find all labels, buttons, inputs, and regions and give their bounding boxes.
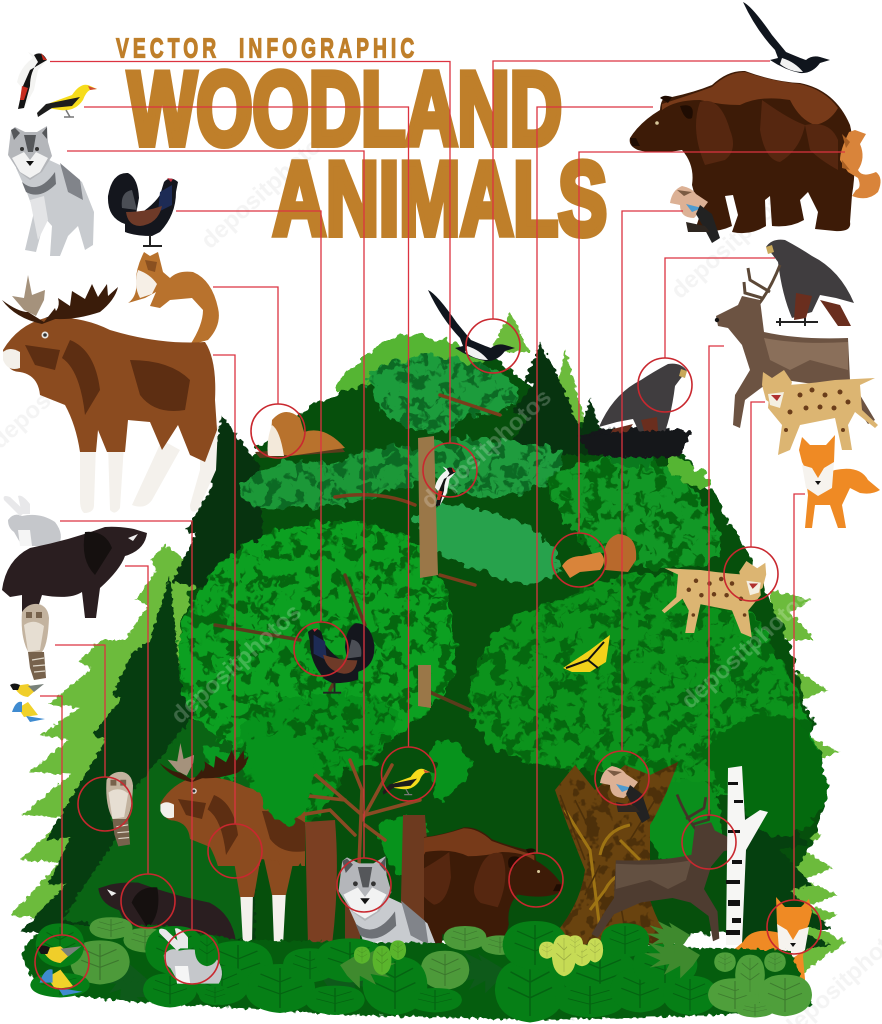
owl in forest [106, 772, 133, 846]
leaves over hare [195, 934, 231, 1005]
icon: ural owl [22, 604, 49, 680]
line: lynx [751, 402, 765, 547]
line: oriole [84, 107, 408, 747]
pine branches [300, 760, 420, 890]
icon: wild boar [2, 527, 147, 620]
jay in forest [600, 766, 650, 823]
line: owl [55, 645, 105, 777]
icon: golden eagle [766, 240, 854, 326]
forest watermarks: depositphotos [676, 584, 817, 714]
forest watermarks: depositphotos [416, 384, 557, 514]
fern fronds [89, 952, 568, 1010]
line: boar [125, 566, 148, 874]
icon: hare [4, 496, 61, 546]
pale leaves right [708, 952, 812, 1018]
oak trunk [545, 762, 678, 945]
moose upper legs [232, 850, 296, 897]
line: marten [213, 287, 278, 404]
circle: fox [767, 900, 821, 954]
light crown highlights [335, 336, 712, 490]
dark firs [172, 343, 604, 600]
tits in forest [37, 946, 82, 996]
oriole in forest [383, 769, 431, 795]
forest animals [98, 290, 812, 1012]
line: magpie [493, 61, 770, 319]
left oak crown [178, 521, 457, 760]
circle: hare [165, 930, 219, 984]
icon: tits [10, 684, 45, 722]
branches [215, 395, 500, 710]
marten on branch [255, 412, 345, 458]
moose body and head [160, 743, 305, 866]
circle: deer [682, 815, 736, 869]
yellow leaves [539, 935, 603, 976]
lower canopy bushes [205, 694, 470, 878]
wolf in forest [339, 856, 442, 1012]
nest [578, 427, 692, 458]
moose legs [240, 890, 286, 945]
callout circles [35, 319, 821, 989]
lynx in forest [662, 561, 766, 638]
callout lines [40, 61, 845, 935]
scalloped base [22, 925, 812, 1020]
icon: moose [2, 275, 218, 513]
circle: tits [35, 935, 89, 989]
circle: squirrel [552, 533, 606, 587]
canopy base silhouette [160, 345, 826, 950]
line: jay [622, 211, 683, 751]
forest watermarks: depositphotos [166, 599, 307, 729]
foreground leaves [22, 917, 812, 1022]
animals list: right column [630, 2, 881, 528]
upper crown [238, 355, 722, 585]
dark fir left [20, 575, 255, 945]
watermarks on paper: depositphotos [666, 174, 807, 304]
light green firs [10, 312, 846, 975]
central fern and pale fronds [340, 921, 700, 988]
icon: woodpecker [17, 52, 47, 109]
woodpecker in forest [435, 466, 456, 506]
circle: jay [595, 751, 649, 805]
line: fox [794, 494, 805, 900]
icon: pine marten [128, 252, 219, 345]
circle: magpie [466, 319, 520, 373]
understory tree trunks [300, 760, 435, 945]
line: eagle [665, 258, 775, 358]
dark fir right [735, 800, 832, 960]
magpie in forest [428, 290, 515, 361]
nest front [580, 431, 692, 458]
line: tits [40, 696, 62, 935]
bear in forest [424, 827, 562, 944]
icon: capercaillie [108, 173, 178, 246]
circle: moose [208, 824, 262, 878]
watermarks on paper: depositphotos [196, 124, 337, 254]
line: hare [60, 521, 192, 930]
circle: boar [121, 874, 175, 928]
birch trunk [726, 766, 768, 945]
icon: lynx [762, 370, 878, 455]
title block [116, 34, 607, 258]
icon: grey wolf [8, 126, 94, 256]
deer in forest [591, 794, 736, 941]
hare among leaves [159, 928, 222, 984]
circle: woodpecker [423, 443, 477, 497]
line: wolf [67, 151, 364, 858]
line: woodpecker [50, 62, 450, 443]
squirrel in forest [562, 534, 636, 578]
boar in forest [98, 882, 236, 971]
circle: owl [78, 777, 132, 831]
fox in forest [731, 897, 812, 990]
icon: red fox [799, 435, 880, 528]
moose in forest [160, 743, 332, 945]
icon: red squirrel on bear [840, 130, 881, 198]
bush over moose [245, 734, 316, 825]
mid green leaves [30, 921, 717, 1022]
subtitle: VECTOR INFOGRAPHIC [116, 34, 418, 64]
line: squirrel [579, 152, 845, 533]
line: deer [709, 346, 724, 815]
capercaillie in forest [308, 623, 374, 693]
circle: bear [509, 853, 563, 907]
bright green tall leaves [354, 940, 406, 975]
right oak crown [469, 574, 827, 865]
line: bear [537, 107, 653, 853]
circle: marten [251, 404, 305, 458]
heading: woodland: WOODLAND [128, 52, 562, 168]
circle: lynx [724, 547, 778, 601]
circle: capercaillie [294, 622, 348, 676]
animals list: left column [2, 52, 219, 722]
brown trunk left [305, 820, 337, 945]
heading: animals: ANIMALS [273, 142, 607, 258]
brown trunk mid [345, 815, 435, 945]
forest backdrop [10, 312, 846, 975]
butterfly [563, 635, 610, 672]
icon: eurasian jay [670, 186, 720, 243]
pale leaves left [70, 917, 519, 990]
icon: brown bear [630, 71, 855, 233]
line: capercaillie [176, 211, 321, 622]
icon: golden oriole [37, 85, 97, 117]
line: moose [213, 355, 235, 824]
circle: oriole [382, 747, 436, 801]
forest watermarks [166, 384, 817, 729]
circle: wolf [337, 858, 391, 912]
icon: red deer [715, 265, 875, 428]
eagle in forest [599, 364, 687, 450]
circle: eagle [638, 358, 692, 412]
light trunks upper [418, 436, 438, 708]
icon: magpie [743, 2, 830, 73]
